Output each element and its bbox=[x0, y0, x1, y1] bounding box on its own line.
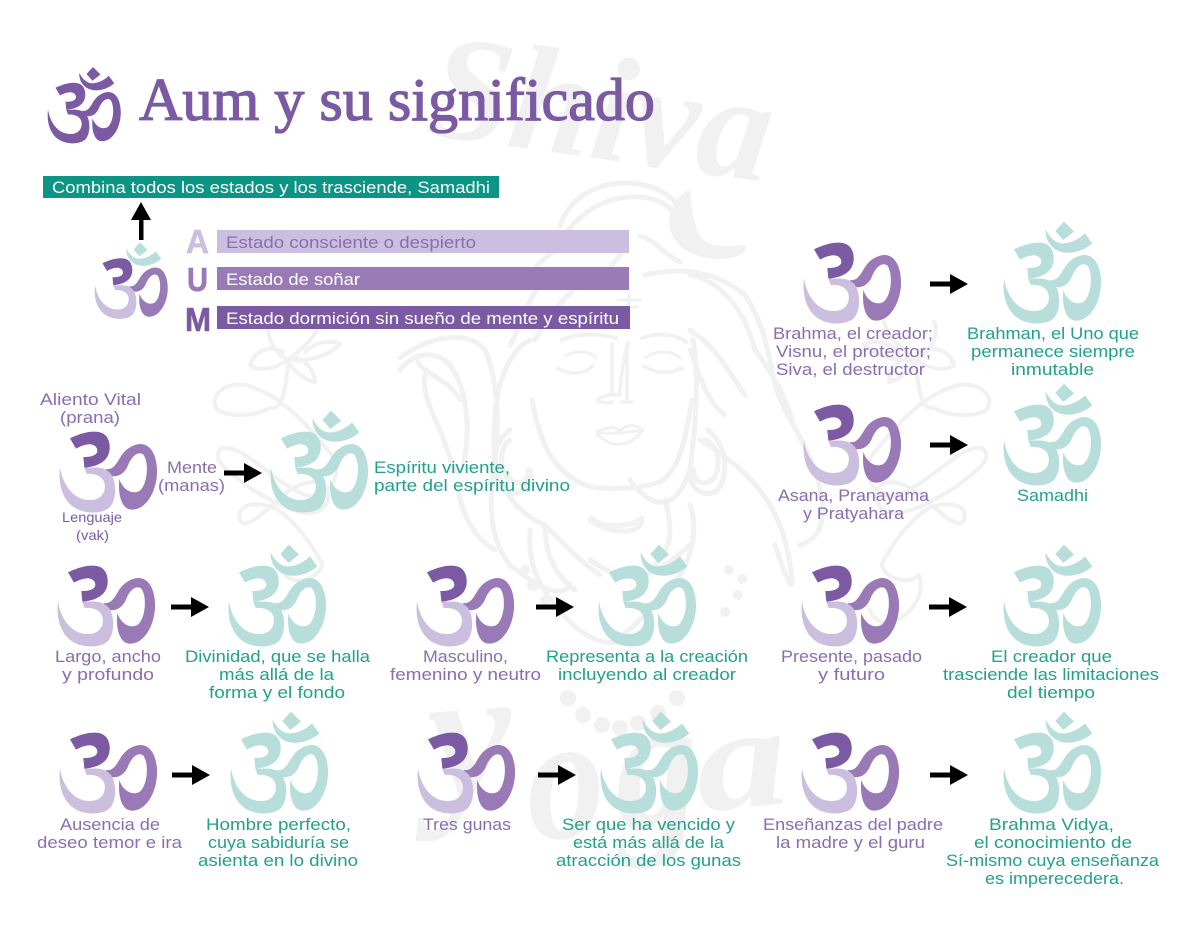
background watermark: Shiva word: Shiva bbox=[419, 2, 784, 215]
text: Brahman bbox=[967, 325, 1139, 379]
icon: om purple, Masculino bbox=[417, 566, 514, 646]
icon: om purple, prana bbox=[60, 432, 157, 512]
background: right lotus and knot bbox=[864, 322, 989, 622]
arrow bbox=[930, 274, 968, 294]
icon: small AUM om bbox=[95, 242, 168, 319]
text: Lenguaje: (vak) bbox=[76, 527, 109, 543]
text: Largo: y profundo bbox=[62, 666, 154, 684]
background: necklace beads bbox=[520, 565, 747, 736]
background watermark: Yoga word: a bbox=[687, 675, 795, 844]
letter M: M bbox=[185, 301, 211, 338]
text: Representa: incluyendo al creador bbox=[558, 666, 737, 684]
text: Tres gunas: Tres gunas bbox=[423, 816, 511, 834]
text: Mente: (manas) bbox=[158, 477, 225, 495]
icon: om purple, Presente bbox=[802, 566, 899, 646]
text: Ser que ha vencido: Ser que ha vencido y bbox=[562, 816, 736, 834]
bar: state U bbox=[217, 267, 629, 290]
text: Lenguaje bbox=[62, 509, 122, 543]
text: Masculino bbox=[390, 648, 541, 684]
text: El creador: trasciende las limitaciones bbox=[943, 666, 1159, 684]
text: El creador: del tiempo bbox=[1007, 684, 1095, 702]
text: Masculino: femenino y neutro bbox=[390, 666, 541, 684]
arrow bbox=[930, 765, 968, 785]
background watermark: Yoga word: y bbox=[400, 626, 520, 843]
text: Ensenanzas: Enseñanzas del padre bbox=[763, 816, 943, 834]
background watermark: Yoga word: g bbox=[603, 656, 706, 872]
icon: om purple, Brahma bbox=[804, 243, 901, 323]
text: Ausencia: Ausencia de bbox=[60, 816, 160, 834]
arrow bbox=[171, 597, 209, 617]
text: Ausencia bbox=[37, 816, 183, 852]
text: Largo: Largo, ancho bbox=[55, 648, 161, 666]
background: left lotus and knot bbox=[215, 322, 340, 580]
text: Aliento Vital: Aliento Vital bbox=[40, 391, 141, 409]
bar: state A: Estado consciente o despierto bbox=[226, 234, 476, 252]
text: Espiritu viviente: parte del espíritu divino bbox=[374, 477, 570, 495]
text: Espiritu viviente: Espíritu viviente, bbox=[374, 459, 510, 477]
text: Asana: y Pratyahara bbox=[803, 505, 905, 523]
icon: om purple, Asana bbox=[804, 405, 901, 485]
text: Masculino: Masculino, bbox=[423, 648, 508, 666]
text: Brahma Vidya: Sí-mismo cuya enseñanza bbox=[946, 852, 1160, 870]
text: Divinidad: Divinidad, que se halla bbox=[185, 648, 371, 666]
text: Mente: Mente bbox=[167, 459, 217, 477]
text: Hombre perfecto bbox=[198, 816, 358, 870]
text: Ser que ha vencido: atracción de los gunas bbox=[556, 852, 741, 870]
text: Asana bbox=[778, 487, 930, 523]
text: Brahma Vidya: es imperecedera. bbox=[985, 870, 1124, 888]
text: Divinidad: forma y el fondo bbox=[209, 684, 345, 702]
text: Brahman: permanece siempre bbox=[971, 343, 1135, 361]
arrow: up to banner bbox=[131, 202, 151, 240]
text: Brahma Vidya: el conocimiento de bbox=[974, 834, 1132, 852]
text: Brahma, Visnu, Siva bbox=[773, 325, 933, 379]
text: Brahma Vidya: Brahma Vidya, bbox=[989, 816, 1114, 834]
icon: om teal, Divinidad bbox=[229, 545, 326, 646]
arrow bbox=[224, 463, 262, 483]
bar: state M bbox=[217, 306, 630, 329]
text: Espiritu viviente bbox=[374, 459, 570, 495]
text: Hombre perfecto: asienta en lo divino bbox=[198, 852, 358, 870]
text: Brahma, Visnu, Siva: Siva, el destructor bbox=[776, 361, 926, 379]
bar: state A bbox=[217, 230, 629, 253]
letter U: U bbox=[187, 261, 208, 298]
text: Asana: Asana, Pranayama bbox=[778, 487, 930, 505]
text: Brahman: Brahman, el Uno que bbox=[967, 325, 1139, 343]
text: Divinidad: más allá de la bbox=[219, 666, 335, 684]
background watermark: Yoga word bbox=[400, 626, 795, 879]
icon: om purple, Largo bbox=[58, 566, 155, 646]
text: Representa bbox=[546, 648, 748, 684]
icon: om purple, Ensenanzas bbox=[802, 733, 899, 813]
text: Ser que ha vencido: está más allá de la bbox=[573, 834, 725, 852]
text: Divinidad bbox=[185, 648, 371, 702]
text: Mente bbox=[158, 459, 225, 495]
text: Ser que ha vencido bbox=[556, 816, 741, 870]
icon: om teal, Ser que ha vencido bbox=[601, 712, 698, 813]
bar: state U: Estado de soñar bbox=[226, 271, 361, 289]
title: Aum y su significado bbox=[139, 67, 655, 133]
icon: om teal, Brahma Vidya bbox=[1004, 712, 1101, 813]
text: Aliento Vital: (prana) bbox=[60, 409, 120, 427]
text: Presente bbox=[781, 648, 922, 684]
arrow bbox=[172, 765, 210, 785]
icon: om teal, Samadhi bbox=[1004, 384, 1101, 485]
text: Samadhi: Samadhi bbox=[1017, 487, 1088, 505]
icon: om teal, El creador bbox=[1004, 545, 1101, 646]
background illustration: Shiva face bbox=[400, 183, 823, 643]
letter A: A bbox=[186, 223, 209, 260]
text: Hombre perfecto: cuya sabiduría se bbox=[208, 834, 349, 852]
arrow bbox=[929, 597, 967, 617]
icon: om purple, Tres gunas bbox=[418, 733, 515, 813]
icon: om teal, Representa bbox=[599, 545, 696, 646]
text: Largo bbox=[55, 648, 161, 684]
text: Hombre perfecto: Hombre perfecto, bbox=[206, 816, 351, 834]
icon: om purple, Ausencia bbox=[60, 733, 157, 813]
background watermark: Yoga word: o bbox=[519, 675, 611, 879]
arrow bbox=[538, 765, 576, 785]
text: Brahma Vidya bbox=[946, 816, 1160, 888]
text: Lenguaje: Lenguaje bbox=[62, 509, 122, 525]
text: Brahma, Visnu, Siva: Brahma, el creador; bbox=[773, 325, 933, 343]
bar: state M: Estado dormición sin sueño de mente y espíritu bbox=[226, 310, 619, 328]
arrow bbox=[930, 435, 968, 455]
text: Presente: Presente, pasado bbox=[781, 648, 922, 666]
title icon: om symbol bbox=[48, 67, 121, 143]
text: Ensenanzas bbox=[763, 816, 943, 852]
text: Ausencia: deseo temor e ira bbox=[37, 834, 183, 852]
text: Aliento Vital bbox=[40, 391, 141, 427]
arrow bbox=[536, 597, 574, 617]
icon: om teal, Hombre perfecto bbox=[231, 712, 328, 813]
text: Ensenanzas: la madre y el guru bbox=[776, 834, 925, 852]
text: Presente: y futuro bbox=[818, 666, 885, 684]
banner: Samadhi: Combina todos los estados y los trasciende, Samadhi bbox=[52, 179, 490, 197]
text: El creador: El creador que bbox=[991, 648, 1112, 666]
icon: om teal, Brahman bbox=[1004, 222, 1101, 323]
text: Representa: Representa a la creación bbox=[546, 648, 748, 666]
icon: om teal, espiritu bbox=[271, 411, 368, 512]
text: Brahma, Visnu, Siva: Visnu, el protector; bbox=[776, 343, 931, 361]
text: Brahman: inmutable bbox=[1011, 361, 1094, 379]
text: El creador bbox=[943, 648, 1159, 702]
